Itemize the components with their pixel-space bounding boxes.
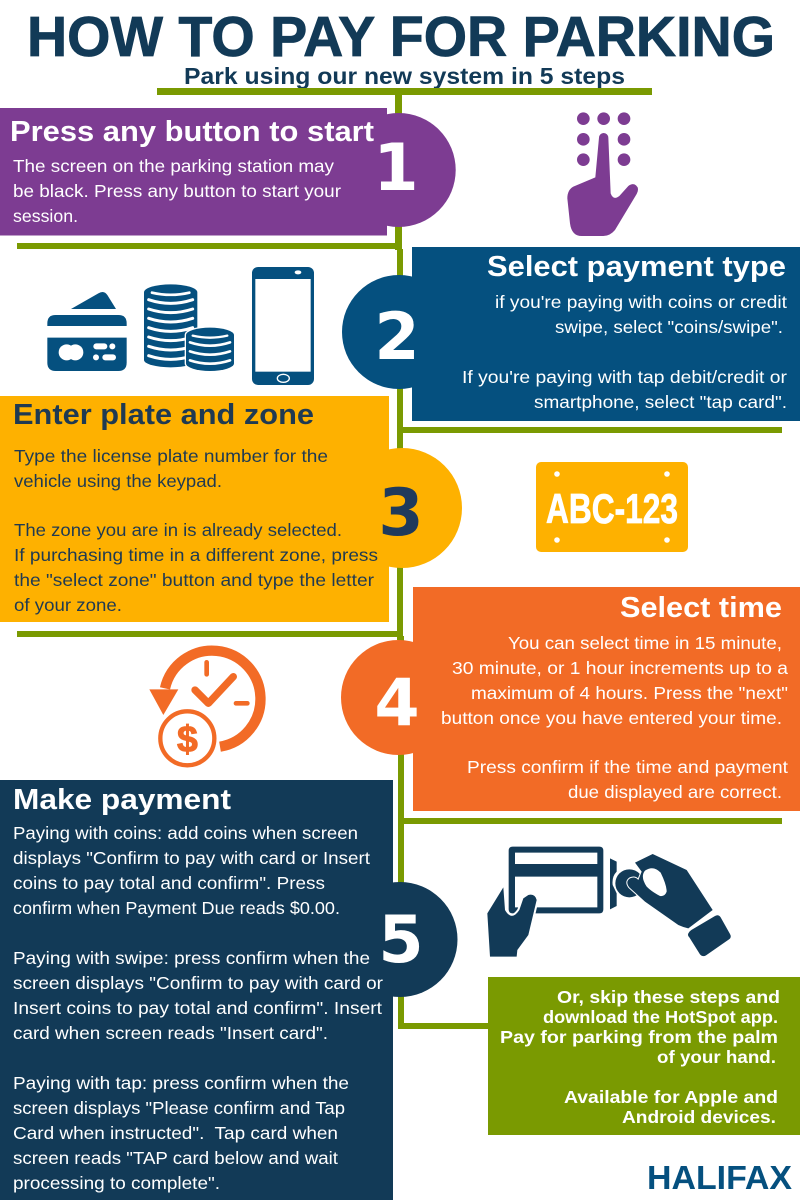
icon: credit card bbox=[47, 292, 127, 371]
subtitle: Park using our new system in 5 steps bbox=[184, 63, 625, 89]
icon: hands tapping card on reader bbox=[487, 847, 731, 957]
callout: HotSpot app: Pay for parking from the palm bbox=[500, 1027, 778, 1047]
step 5 text: coins: displays "Confirm to pay with card or Insert bbox=[13, 848, 370, 868]
step 5 text: tap: screen reads "TAP card below and wait bbox=[13, 1148, 338, 1168]
icon: finger pressing keypad bbox=[567, 112, 638, 236]
step 3 text: The zone you are in is already selected. bbox=[14, 520, 342, 540]
icon: credit card, coins and phone bbox=[47, 267, 314, 385]
step 2 number: 2 bbox=[374, 300, 420, 375]
step 5 text: coins bbox=[13, 823, 370, 918]
step 5 text: tap: screen displays "Please confirm and Tap bbox=[13, 1098, 345, 1118]
step 1 heading: Press any button to start bbox=[10, 116, 374, 148]
step 3 text bbox=[14, 446, 378, 615]
step 2 text: if you're paying with coins or credit bbox=[495, 292, 787, 312]
panel: step 2 select payment type bbox=[342, 247, 800, 421]
timeline connector bbox=[17, 88, 782, 1029]
step 5 text: swipe: Paying with swipe: press confirm when the bbox=[13, 948, 370, 968]
step 2 heading: Select payment type bbox=[487, 251, 786, 283]
step 3 text: If purchasing time in a different zone, press bbox=[14, 545, 378, 565]
step 5 heading: Make payment bbox=[13, 784, 231, 816]
title: HOW TO PAY FOR PARKING bbox=[27, 5, 775, 69]
step 2 text: If you're paying with tap debit/credit or bbox=[462, 367, 787, 387]
step 4 heading: Select time bbox=[620, 592, 782, 624]
step 2 text: smartphone, select "tap card". bbox=[534, 392, 787, 412]
callout: HotSpot app: Available for Apple and bbox=[564, 1087, 778, 1107]
step 3 heading: Enter plate and zone bbox=[13, 399, 314, 431]
icon: coin stacks bbox=[144, 284, 234, 371]
step 5 text: swipe bbox=[13, 948, 383, 1043]
icon: licence plate bbox=[536, 462, 688, 552]
step 3 text: of your zone. bbox=[14, 595, 122, 615]
callout: HotSpot app: Or, skip these steps and bbox=[557, 987, 780, 1007]
step 4 text: 30 minute, or 1 hour increments up to a bbox=[452, 658, 788, 678]
step 3 number: 3 bbox=[378, 476, 424, 551]
icon: left hand bbox=[487, 887, 537, 957]
callout: HotSpot app: Android devices. bbox=[622, 1107, 776, 1127]
icon: right hand with card bbox=[615, 854, 731, 956]
step 1 number: 1 bbox=[373, 131, 419, 206]
step 4 text: button once you have entered your time. bbox=[441, 708, 782, 728]
step 5 text: coins: Paying with coins: add coins when screen bbox=[13, 823, 358, 843]
step 2 text bbox=[462, 292, 787, 412]
icon: card reader bbox=[610, 858, 617, 909]
callout: HotSpot app bbox=[488, 977, 800, 1135]
callout: HotSpot app: of your hand. bbox=[657, 1047, 776, 1067]
step 5 text: tap: Card when instructed". Tap card when bbox=[13, 1123, 338, 1143]
step 4 text: maximum of 4 hours. Press the "next" bbox=[471, 683, 788, 703]
step 5 text: swipe: screen displays "Confirm to pay with card or bbox=[13, 973, 383, 993]
step 5 text: tap: Paying with tap: press confirm when the bbox=[13, 1073, 349, 1093]
step 5 text: tap: processing to complete". bbox=[13, 1173, 220, 1193]
step 2 text: swipe, select "coins/swipe". bbox=[555, 317, 783, 337]
step 5 number: 5 bbox=[378, 903, 424, 978]
step 1 text bbox=[13, 156, 341, 226]
icon: smartphone bbox=[252, 267, 314, 385]
icon: clock with coin: $ bbox=[177, 718, 198, 760]
logo: Halifax: HALIFAX bbox=[647, 1159, 792, 1196]
panel: step 4 select time bbox=[341, 587, 800, 811]
callout: HotSpot app: download the HotSpot app. bbox=[543, 1007, 778, 1027]
step 3 text: vehicle using the keypad. bbox=[14, 471, 222, 491]
icon: bank card bbox=[509, 847, 603, 913]
step 1 text: be black. Press any button to start your bbox=[13, 181, 341, 201]
step 4 text: You can select time in 15 minute, bbox=[508, 633, 782, 653]
step 5 text: swipe: card when screen reads "Insert card". bbox=[13, 1023, 328, 1043]
panel: step 3 enter plate and zone bbox=[0, 396, 462, 622]
step 5 text: tap bbox=[13, 1073, 349, 1193]
step 4 text: due displayed are correct. bbox=[568, 782, 782, 802]
step 5 text: coins: coins to pay total and confirm". Press bbox=[13, 873, 325, 893]
step 3 text: the "select zone" button and type the letter bbox=[14, 570, 374, 590]
icon: clock with coin bbox=[149, 651, 260, 770]
step 4 number: 4 bbox=[374, 666, 420, 741]
step 5 text: coins: confirm when Payment Due reads $0.00. bbox=[13, 898, 340, 918]
step 1 text: The screen on the parking station may bbox=[13, 156, 334, 176]
panel: step 1 press any button bbox=[0, 108, 456, 236]
step 5 text: swipe: Insert coins to pay total and confirm". Insert bbox=[13, 998, 382, 1018]
icon: licence plate: ABC-123 bbox=[546, 485, 678, 532]
step 4 text bbox=[441, 633, 788, 802]
panel: step 5 make payment bbox=[0, 780, 458, 1200]
step 4 text: Press confirm if the time and payment bbox=[467, 757, 788, 777]
step 1 text: session. bbox=[13, 206, 78, 226]
step 3 text: Type the license plate number for the bbox=[14, 446, 328, 466]
